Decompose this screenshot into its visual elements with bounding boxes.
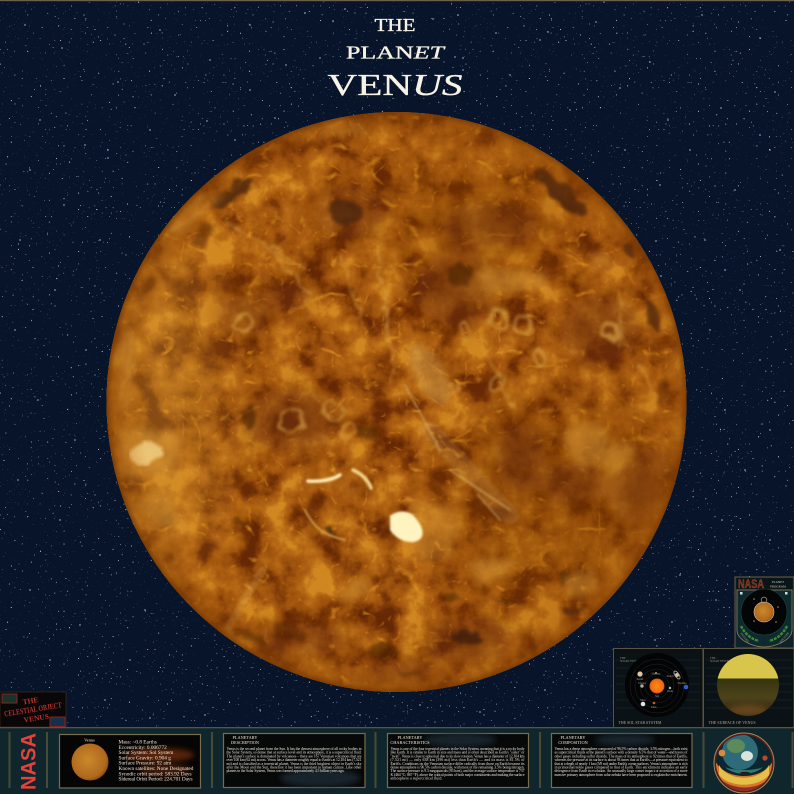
- panel: planet data: Synodic orbit period: 583.92 Days: [118, 771, 192, 777]
- panel: planetary characteristics: [388, 733, 528, 788]
- solar system diagram: Venus: [667, 690, 673, 693]
- panel: planetary composition: in primordial noble gases compared to that of Earth. This enrichment indicates an early: [554, 766, 688, 770]
- title: PLAN ET: [346, 42, 447, 62]
- panel: planetary description: PLANETARY: [233, 735, 257, 740]
- dark radar-dark mountains: [142, 163, 670, 677]
- panel: planetary description: The planet's surface is dominated by volcanoes – there are 167 Venusian volcanoes that are: [226, 754, 362, 758]
- panel: planetary characteristics: The surface pressure is 9.3 megapascals (93 bars), and the average surface temperature is 737: [390, 769, 525, 774]
- panel: NASA mission badge: DISCOVER: [779, 632, 790, 644]
- panel: planetary composition: massive primary atmosphere from solar nebula have been proposed to explain the enrichment.: [554, 773, 688, 777]
- solar system diagram: Mercury: [652, 672, 661, 676]
- panel: planetary characteristics: Earth's. Conditions on the Venusian surface differ radically from those on Earth because its: [390, 762, 525, 766]
- panel: planet data: Mass: ~0.8 Earths: [118, 740, 157, 746]
- panel: planetary characteristics: (7,521 mi) — only 638 km (396 mi) less than Earth's — and its mass is 81.5% of: [390, 758, 525, 763]
- icon: laurel wreath: [741, 626, 787, 641]
- panel: NASA mission badge: PLANET: [772, 580, 784, 584]
- surface view circle: [716, 653, 780, 717]
- surface rings and streaks: [120, 205, 654, 437]
- panel: planet data: Surface Pressure: 92 atm: [118, 760, 172, 767]
- panel: the sol star system: THE: [620, 657, 626, 660]
- badge: Earth emblem: [714, 733, 774, 793]
- panel: planetary composition: as supercritical fluids at the planet's surface with a density 6.5% that of water—and traces of: [554, 751, 688, 755]
- panel: NASA mission badge: PROGRAM: [770, 584, 786, 588]
- panel: celestial object plaque: [0, 692, 66, 727]
- panel: planetary characteristics: like Earth. It is similar to Earth in size and mass and is often described as Earth's "sister" or: [390, 751, 525, 755]
- panel: NASA mission badge: EXPLORE: [739, 632, 750, 643]
- panel: celestial object plaque: THE: [22, 695, 39, 706]
- panel: planetary description: Venus is the second planet from the Sun. It has the densest atmosphere of all rocky bodies in: [226, 747, 362, 751]
- panel: the surface of Venus: THE: [710, 657, 716, 660]
- panel: planetary characteristics: atmosphere a supercritical fluid.: [390, 777, 443, 781]
- panel: planetary description: after the Moon and the Sun, therefore it has been important to human culture. Like other: [226, 766, 362, 770]
- panel: celestial object plaque: VENUS: [23, 712, 50, 725]
- solar system diagram: [625, 653, 689, 717]
- solar system diagram: Mars: [640, 699, 646, 702]
- panel: planetary characteristics: "twin". Venus is close to spherical due to its slow rotation. Venus has a diameter of 12,104 km: [390, 754, 525, 759]
- panel: planetary characteristics: PLANETARY: [398, 735, 422, 740]
- panel: planet data: Surface Gravity: 0.904 g: [118, 754, 171, 761]
- logo: NASA worm: NASA: [18, 733, 40, 790]
- panel: planetary composition: Venus has a dense atmosphere composed of 96.5% carbon dioxide, 3.5% nitrogen—both exist: [554, 747, 688, 752]
- footer bar: [0, 727, 794, 794]
- panel: planetary composition: whereas the pressure at its surface is about 93 times that at Earth's—a pressure equivalent to: [554, 758, 688, 762]
- panel: the sol star system: [614, 648, 703, 728]
- panel: planetary composition: [552, 734, 692, 788]
- panel: planet data: Eccentricity: 0.006772: [118, 745, 167, 751]
- title: THE: [374, 15, 416, 35]
- Maxwell Montes bright spot: [390, 511, 423, 542]
- panel: planetary characteristics: Venus is one of the four terrestrial planets in the Solar System, meaning that it is a rocky body: [390, 747, 525, 752]
- planet Venus globe: [100, 105, 700, 705]
- panel: planetary description: planets in the Solar System, Venus was formed approximately 4.5 billion years ago.: [226, 769, 345, 774]
- solar system diagram: Neptune: [678, 682, 687, 685]
- title: [328, 15, 462, 102]
- panel: planetary composition: that at a depth of nearly 1 km (5/8 mi) under Earth's ocean surfaces. Venus's atmosphere is rich: [554, 762, 688, 766]
- panel: planetary characteristics: dense atmosphere is 96.5% carbon dioxide, with most of the remaining 3.5% being nitrogen.: [390, 766, 525, 770]
- panel: planet data: Venus: [84, 738, 95, 742]
- broad shading: [115, 160, 680, 610]
- solar system diagram: Saturn: [667, 675, 674, 678]
- bright highland patches: [119, 127, 639, 600]
- panel: planetary composition: PLANETARY: [561, 735, 585, 740]
- title: VEN US: [328, 67, 462, 102]
- bright patch left limb: [131, 441, 163, 465]
- panel: planetary description: over 100 km (62 mi) across. Venus has a diameter roughly equal to Earth's at 12,104 km (7,521: [226, 758, 362, 763]
- panel: planetary characteristics: K (464 °C; 867 °F), above the critical points of both major constituents and making the surface: [390, 773, 525, 778]
- panel: celestial object plaque: CELESTIAL OBJECT: [4, 700, 63, 718]
- limb shading: [106, 112, 686, 692]
- panel: planet data: Solar System: Sol System: [118, 750, 174, 756]
- panel: planet data: [60, 734, 200, 788]
- panel: the surface of Venus: [704, 648, 794, 728]
- panel: planetary description: the Solar System, so dense that at surface level and its atmosphere, it is a supercritical fluid.: [226, 751, 362, 756]
- panel: the surface of Venus: THE SURFACE OF VENUS: [708, 721, 756, 725]
- panel: planetary description: mi) and is classified as a terrestrial planet. Venus is the third brightest object in Earth's sky: [226, 762, 362, 766]
- dark lowland regions: [217, 186, 669, 684]
- panel: NASA mission badge: NASA: [738, 577, 764, 591]
- panel: the surface of Venus: SOLAR SYSTEM: [710, 660, 731, 663]
- panel: planetary description: DESCRIPTION: [231, 740, 259, 745]
- panel: planet data: Known satellites: None Designated: [118, 766, 194, 772]
- speckled tessera strip: [409, 344, 451, 406]
- panel: planetary characteristics: CHARACTERISTICS: [390, 740, 430, 745]
- panel: NASA mission badge: [735, 577, 794, 648]
- bright lava streaks: [305, 470, 371, 540]
- panel: planetary composition: COMPOSITION: [558, 740, 588, 745]
- solar system diagram: Uranus: [638, 682, 646, 685]
- thumbnail: Venus: [72, 744, 108, 780]
- solar system diagram: Pluto: [651, 706, 657, 709]
- panel: planetary description: [224, 734, 365, 788]
- panel: the sol star system: SOLAR SYSTEM: [620, 660, 641, 663]
- panel: planetary composition: other gases including sulfur dioxide. The mass of its atmosphere is 92 times that of Earth's,: [554, 754, 688, 759]
- panel: the sol star system: THE SOL STAR SYSTEM: [618, 721, 662, 725]
- panel: planet data: Sidereal Orbit Period: 224.701 Days: [118, 777, 192, 783]
- tessera bands: [228, 385, 510, 627]
- panel: planetary composition: divergence from Earth in evolution. An unusually large comet impact or accretion of a more: [554, 769, 688, 773]
- solar system diagram: Jupiter: [636, 678, 644, 681]
- solar system diagram: Sun: [655, 695, 660, 698]
